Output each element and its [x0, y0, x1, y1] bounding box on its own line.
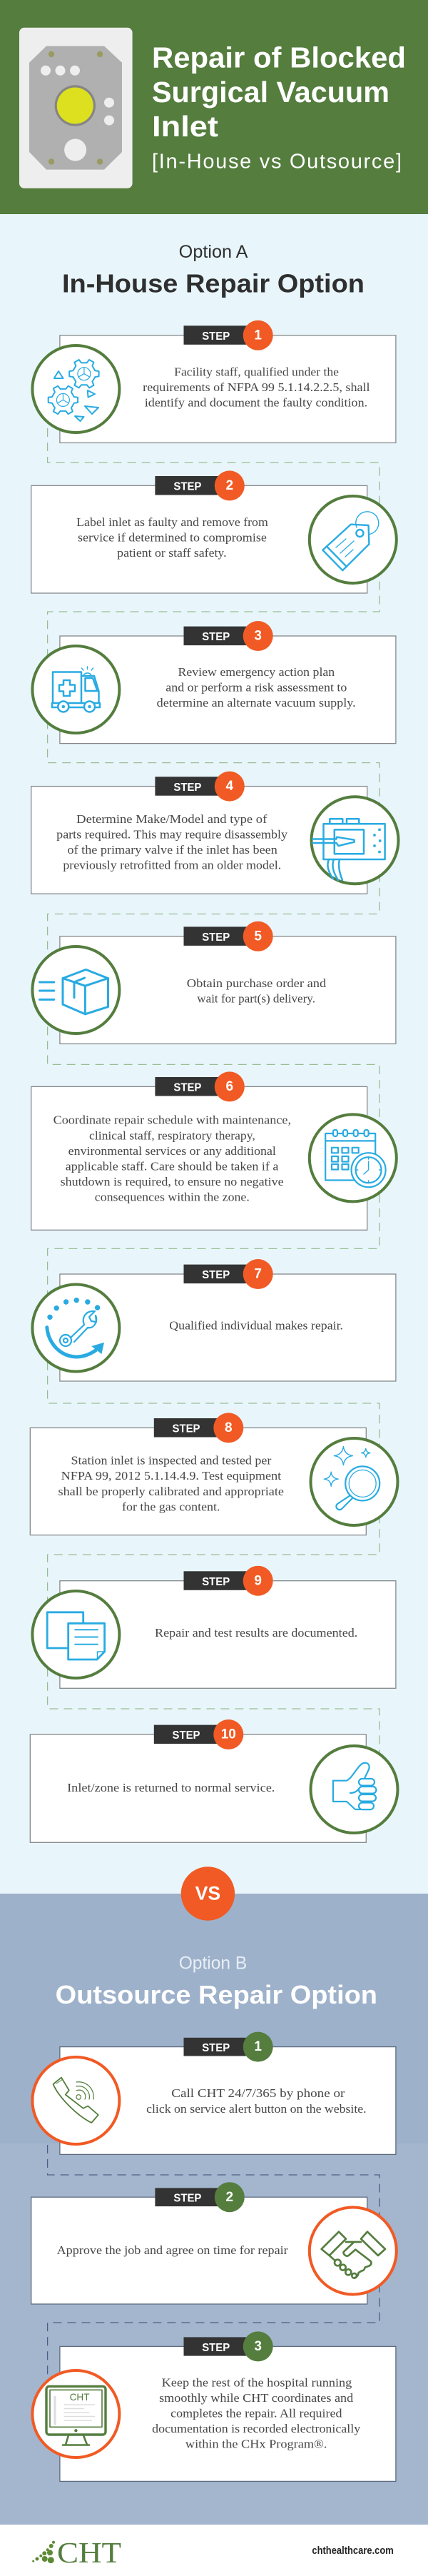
- panel: step 1: 1: [254, 328, 262, 343]
- panel: step 10: [30, 1719, 398, 1842]
- panel: outsource step 3: 3: [254, 2339, 262, 2354]
- badge: VS: VS: [195, 1882, 220, 1904]
- panel: step 8: 8: [225, 1420, 233, 1435]
- panel: step 6: 6: [226, 1079, 233, 1094]
- panel: step 10: Inlet/zone is returned to normal service.: [67, 1781, 275, 1794]
- subtitle: [In-House vs Outsource]: [152, 150, 402, 173]
- title: [152, 41, 406, 143]
- panel: outsource step 3: completes the repair. All required: [170, 2406, 342, 2420]
- panel: step 8: for the gas content.: [122, 1500, 220, 1514]
- panel: step 2: [31, 470, 397, 593]
- panel: step 4: 4: [226, 779, 234, 794]
- panel: header: [0, 0, 428, 214]
- panel: step 9: [32, 1566, 396, 1688]
- panel: step 9: STEP: [202, 1576, 230, 1588]
- panel: step 7: [32, 1259, 396, 1381]
- panel: step 1: identify and document the faulty condition.: [145, 395, 367, 409]
- panel: outsource step 1: Call CHT 24/7/365 by phone or: [171, 2086, 345, 2100]
- panel: step 9: Repair and test results are documented.: [155, 1626, 357, 1640]
- icon: phone: [54, 2078, 98, 2123]
- icon: vacuum inlet plate: [19, 28, 133, 188]
- icon: delivery box: [40, 969, 108, 1014]
- panel: step 6: consequences within the zone.: [95, 1190, 250, 1203]
- panel: step 6: Coordinate repair schedule with maintenance,: [54, 1113, 291, 1127]
- heading: option A: [62, 242, 365, 298]
- panel: outsource step 2: Approve the job and agree on time for repair: [57, 2243, 288, 2257]
- icon: calendar and clock: [325, 1130, 386, 1187]
- icon: gears: [49, 360, 99, 421]
- panel: outsource step 2: 2: [226, 2190, 233, 2205]
- icon: magnifier and sparkles: [324, 1447, 379, 1510]
- panel: step 7: STEP: [202, 1269, 230, 1281]
- panel: outsource step 3: within the CHx Program®.: [185, 2438, 327, 2451]
- title: Repair of Blocked: [152, 41, 406, 74]
- website: chthealthcare.com: [312, 2545, 394, 2557]
- panel: outsource step 3: documentation is recorded electronically: [152, 2422, 361, 2435]
- icon: monitor: [46, 2386, 106, 2445]
- panel: step 7: 7: [254, 1267, 262, 1282]
- icon: thumbs up: [333, 1763, 376, 1809]
- panel: outsource step 1: [32, 2032, 396, 2154]
- panel: outsource step 1: STEP: [202, 2042, 230, 2054]
- connector: outsource dashed path: [48, 2145, 379, 2380]
- panel: step 1: requirements of NFPA 99 5.1.14.2.2.5, shall: [143, 380, 370, 394]
- logo: CHT: CHT: [57, 2536, 121, 2569]
- panel: step 4: STEP: [173, 782, 202, 794]
- panel: step 4: of the primary valve if the inlet has been: [67, 843, 277, 857]
- panel: step 5: STEP: [202, 931, 230, 944]
- panel: outsource step 2: STEP: [173, 2193, 202, 2205]
- panel: outsource step 1: 1: [254, 2039, 262, 2054]
- heading: option B: Outsource Repair Option: [56, 1980, 377, 2009]
- panel: step 3: STEP: [202, 631, 230, 643]
- panel: step 3: determine an alternate vacuum supply.: [157, 696, 356, 709]
- icon: tag: [322, 512, 379, 570]
- panel: step 3: [32, 621, 396, 744]
- panel: step 5: [32, 921, 396, 1044]
- title: Surgical Vacuum: [152, 76, 389, 108]
- logo: CHT: [32, 2536, 121, 2569]
- panel: step 2: service if determined to compromise: [78, 530, 267, 544]
- connector: in-house dashed path: [48, 428, 379, 1784]
- icon: handshake: [322, 2232, 385, 2278]
- panel: step 10: STEP: [173, 1729, 200, 1742]
- panel: step 8: NFPA 99, 2012 5.1.14.4.9. Test equipment: [61, 1469, 281, 1483]
- panel: outsource step 1: click on service alert button on the website.: [146, 2102, 367, 2116]
- heading: option B: [56, 1953, 377, 2009]
- panel: step 4: parts required. This may require disassembly: [56, 828, 288, 842]
- panel: step 3: 3: [254, 629, 262, 644]
- panel: outsource step 3: Keep the rest of the hospital running: [162, 2375, 352, 2389]
- panel: outsource step 3: smoothly while CHT coordinates and: [159, 2391, 354, 2405]
- panel: step 6: [31, 1071, 397, 1230]
- panel: step 4: previously retrofitted from an older model.: [63, 859, 281, 872]
- icon: valve and screwdriver: [312, 819, 385, 880]
- panel: outsource step 2: [31, 2182, 397, 2304]
- panel: outsource step 3: STEP: [202, 2342, 230, 2354]
- panel: step 1: [32, 320, 396, 443]
- title: Inlet: [152, 110, 218, 143]
- panel: step 4: [31, 772, 398, 894]
- panel: step 6: shutdown is required, to ensure no negative: [61, 1175, 284, 1188]
- icon: monitor: CHT: [70, 2391, 90, 2403]
- panel: outsource step 3: [32, 2331, 396, 2481]
- panel: step 5: wait for part(s) delivery.: [197, 992, 315, 1005]
- panel: step 9: 9: [254, 1573, 262, 1588]
- icon: wrench and arrow: [47, 1298, 104, 1357]
- panel: step 3: and or perform a risk assessment to: [165, 681, 347, 694]
- panel: step 8: Station inlet is inspected and tested per: [71, 1453, 272, 1467]
- panel: step 5: 5: [254, 929, 262, 944]
- panel: step 2: patient or staff safety.: [117, 546, 227, 560]
- panel: step 6: STEP: [173, 1082, 202, 1094]
- icon: ambulance: [52, 667, 100, 712]
- panel: step 2: Label inlet as faulty and remove from: [76, 515, 268, 529]
- panel: step 1: STEP: [202, 330, 230, 343]
- badge: VS: [181, 1867, 235, 1921]
- panel: step 8: shall be properly calibrated and appropriate: [58, 1485, 284, 1498]
- panel: step 5: Obtain purchase order and: [187, 976, 327, 990]
- icon: documents: [47, 1612, 105, 1660]
- panel: step 6: applicable staff. Care should be taken if a: [66, 1160, 279, 1173]
- panel: step 1: Facility staff, qualified under the: [174, 365, 339, 378]
- panel: step 7: Qualified individual makes repair.: [169, 1318, 343, 1332]
- panel: step 8: STEP: [173, 1423, 200, 1435]
- panel: step 8: [30, 1413, 398, 1535]
- panel: step 4: Determine Make/Model and type of: [76, 812, 268, 826]
- panel: step 2: STEP: [173, 481, 202, 493]
- panel: step 3: Review emergency action plan: [178, 665, 335, 679]
- footer: [0, 2525, 428, 2576]
- heading: option A: In-House Repair Option: [62, 268, 365, 298]
- panel: step 6: environmental services or any additional: [68, 1144, 276, 1158]
- heading: option A: Option A: [179, 242, 248, 262]
- panel: step 10: 10: [221, 1727, 236, 1742]
- heading: option B: Option B: [179, 1953, 247, 1973]
- panel: step 2: 2: [226, 478, 233, 493]
- panel: step 6: clinical staff, respiratory therapy,: [89, 1128, 255, 1142]
